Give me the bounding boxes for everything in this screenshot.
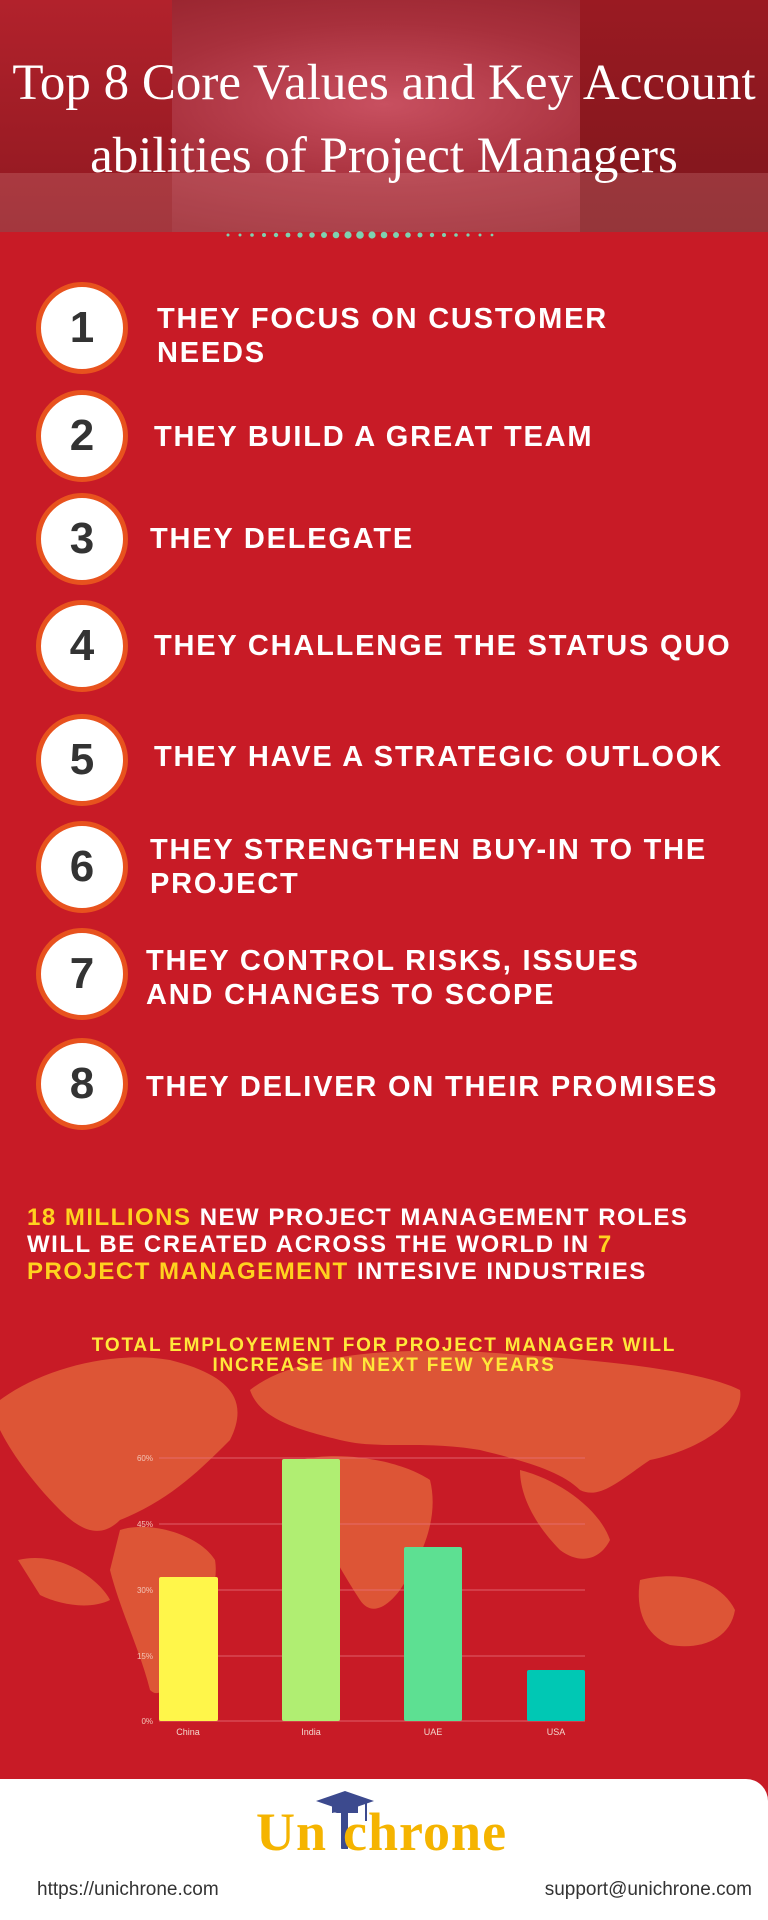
item 3: THEY DELEGATE [150,523,414,555]
bar chart: 0% [141,1717,153,1726]
item 1: 1 [70,303,94,352]
bar chart: 15% [137,1652,153,1661]
item 5 [36,714,723,806]
chart title: INCREASE IN NEXT FEW YEARS [212,1355,556,1376]
item 4 [36,600,731,692]
footer panel [0,1779,768,1920]
item 1: NEEDS [157,337,266,369]
item 8: 8 [70,1059,94,1108]
item 6: 6 [70,842,94,891]
item 7: AND CHANGES TO SCOPE [146,979,555,1011]
title: Top 8 Core Values and Key Account [12,55,756,111]
left suit panel [0,0,172,232]
item 2: THEY BUILD A GREAT TEAM [154,421,593,453]
item 8 [36,1038,718,1130]
item 2 [36,390,593,482]
item 8: THEY DELIVER ON THEIR PROMISES [146,1071,718,1103]
title [12,55,756,184]
item 1 [36,282,608,374]
bar chart [137,1454,585,1737]
header banner [0,0,768,232]
world map background [0,1350,740,1694]
chart title [92,1335,676,1376]
stats text: 18 MILLIONS NEW PROJECT MANAGEMENT ROLES [27,1204,688,1231]
stats text: WILL BE CREATED ACROSS THE WORLD IN 7 [27,1231,613,1258]
item 2: 2 [70,411,94,460]
logo: Unichrone [256,1802,507,1862]
item 3 [36,493,414,585]
item 7: 7 [70,949,94,998]
item 4: 4 [70,621,94,670]
item 6: THEY STRENGTHEN BUY-IN TO THE [150,834,707,866]
item 5: THEY HAVE A STRATEGIC OUTLOOK [154,741,723,773]
bar chart: India [301,1727,321,1737]
item 6 [36,821,707,913]
item 1: THEY FOCUS ON CUSTOMER [157,303,608,335]
bar chart: 60% [137,1454,153,1463]
email: support@unichrone.com [545,1879,752,1900]
item 5: 5 [70,735,94,784]
stats text [27,1204,688,1285]
bar chart: China [176,1727,200,1737]
website link: https://unichrone.com [37,1879,219,1900]
bar chart: 30% [137,1586,153,1595]
bar chart: UAE [424,1727,442,1737]
chart title: TOTAL EMPLOYEMENT FOR PROJECT MANAGER WILL [92,1335,676,1356]
bar chart: USA [547,1727,565,1737]
item 7 [36,928,640,1020]
stats text: PROJECT MANAGEMENT INTESIVE INDUSTRIES [27,1258,647,1285]
item 7: THEY CONTROL RISKS, ISSUES [146,945,640,977]
bar chart: 45% [137,1520,153,1529]
right suit panel [580,0,768,232]
title: abilities of Project Managers [90,128,678,184]
item 3: 3 [70,514,94,563]
item 4: THEY CHALLENGE THE STATUS QUO [154,630,731,662]
item 6: PROJECT [150,868,300,900]
icon: graduation cap [316,1791,374,1849]
dotted divider [226,231,494,239]
